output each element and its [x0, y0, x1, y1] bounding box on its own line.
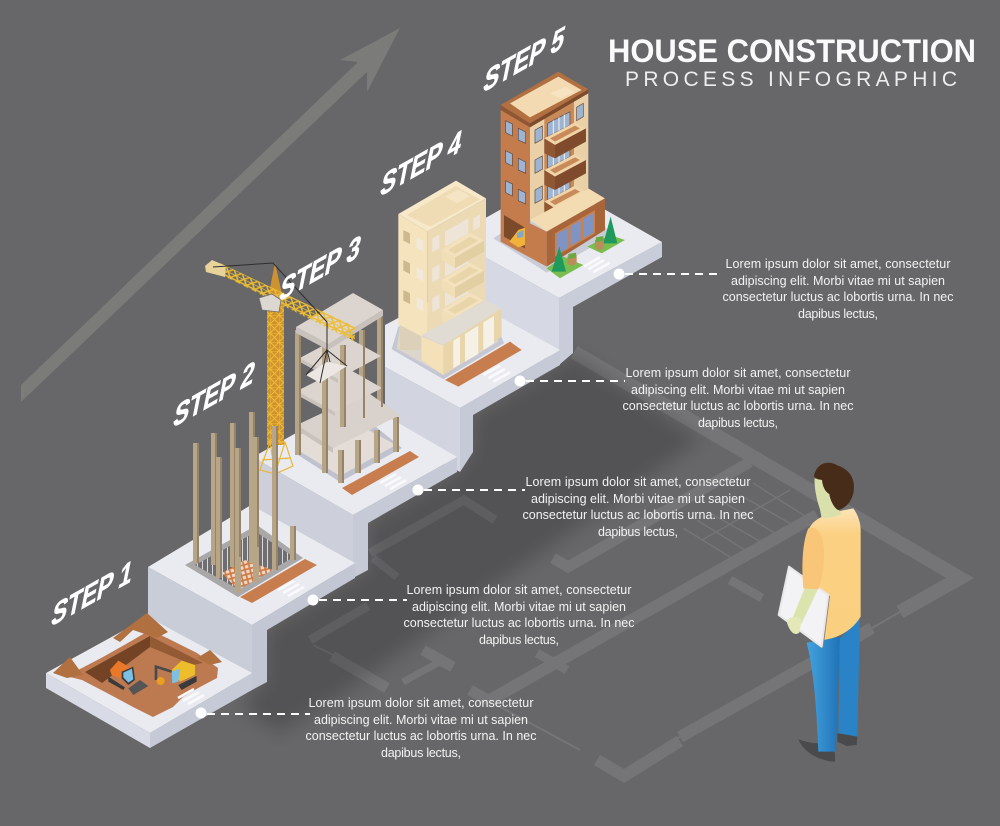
pit	[85, 636, 203, 695]
left wall	[501, 108, 547, 267]
sub heading: PROCESS INFOGRAPHIC	[625, 68, 957, 91]
crosswalk	[483, 366, 510, 382]
roof	[501, 72, 588, 127]
crosswalk	[584, 257, 610, 272]
description: Lorem ipsum dolor sit amet, consectetur	[526, 475, 750, 489]
tablet	[779, 567, 830, 648]
roof	[398, 181, 486, 232]
slabs	[297, 335, 400, 453]
excavator	[156, 661, 197, 690]
floor pad and road strip	[295, 418, 419, 495]
crosswalk	[278, 581, 304, 596]
left windows	[506, 121, 526, 204]
arm	[792, 587, 818, 623]
hand	[787, 617, 802, 634]
step 5 building	[493, 72, 625, 278]
description	[622, 366, 854, 430]
column shading	[299, 317, 399, 483]
description: Lorem ipsum dolor sit amet, consectetur	[308, 696, 534, 710]
platform: step 2	[148, 505, 355, 690]
trees and planters	[547, 217, 625, 278]
garage with car	[504, 215, 525, 248]
right wall	[427, 198, 486, 332]
connector	[514, 376, 625, 386]
cables and hanging slab	[213, 263, 347, 383]
cab	[259, 294, 281, 312]
callout step 1	[196, 696, 536, 760]
window mullions	[553, 115, 564, 197]
step labels	[48, 18, 568, 635]
step 2 foundation	[185, 412, 317, 603]
connector	[308, 594, 407, 606]
growth arrow	[21, 28, 400, 402]
man holding plans	[779, 463, 861, 762]
description: adipiscing elit. Morbi vitae mi ut sapien	[631, 383, 845, 397]
description: Lorem ipsum dolor sit amet, consectetur	[406, 583, 632, 597]
description: consectetur luctus ac lobortis urna. In nec	[622, 399, 854, 413]
foundation pad	[392, 300, 504, 379]
bulldozer	[108, 661, 148, 695]
right windows	[535, 103, 583, 203]
platform: step 5	[450, 180, 662, 365]
back columns	[355, 317, 399, 473]
columns	[193, 412, 296, 592]
step 4 label: STEP 4	[377, 122, 465, 205]
shoes	[798, 733, 857, 762]
crane jib	[216, 263, 355, 342]
soil mounds	[53, 613, 222, 678]
left windows	[403, 230, 410, 304]
right wall	[530, 93, 588, 220]
balconies	[544, 122, 586, 222]
step 1 excavation	[53, 613, 222, 717]
description	[306, 696, 536, 760]
description	[404, 583, 634, 647]
description: adipiscing elit. Morbi vitae mi ut sapien	[314, 713, 528, 727]
base pad	[493, 193, 610, 273]
description: dapibus lectus,	[598, 525, 678, 539]
description	[522, 475, 754, 539]
step 5 label: STEP 5	[480, 18, 568, 101]
description: dapibus lectus,	[798, 307, 878, 321]
counterweight	[205, 260, 226, 277]
callout step 2	[308, 583, 634, 647]
connector	[614, 268, 722, 280]
trousers	[807, 618, 860, 752]
description: consectetur luctus ac lobortis urna. In nec	[522, 508, 754, 522]
description: adipiscing elit. Morbi vitae mi ut sapien	[412, 600, 626, 614]
soil	[66, 630, 218, 717]
platform: step 3	[253, 399, 457, 578]
title	[608, 33, 976, 91]
step 2 label: STEP 2	[170, 354, 258, 436]
step 1 label: STEP 1	[48, 552, 136, 635]
face and neck	[815, 478, 842, 518]
staircase platforms	[46, 180, 662, 748]
description: adipiscing elit. Morbi vitae mi ut sapien	[531, 492, 745, 506]
floor plan on the ground	[310, 352, 960, 776]
shadow cast by staircase	[245, 353, 700, 732]
connector	[412, 484, 525, 496]
description: dapibus lectus,	[698, 416, 778, 430]
tower crane	[205, 260, 355, 474]
crosswalk	[178, 689, 204, 704]
sleeve	[802, 528, 824, 589]
step 3 building frame	[295, 293, 419, 495]
hair	[814, 463, 854, 510]
top slab	[296, 293, 383, 350]
callout step 3	[412, 475, 754, 539]
road strip	[240, 559, 317, 603]
recessed brown wall	[544, 100, 574, 210]
crane base	[260, 442, 293, 474]
rebar pit	[185, 525, 303, 597]
description: Lorem ipsum dolor sit amet, consectetur	[726, 257, 950, 271]
description: Lorem ipsum dolor sit amet, consectetur	[626, 366, 850, 380]
crosswalk	[380, 474, 406, 489]
description: adipiscing elit. Morbi vitae mi ut sapien	[731, 274, 945, 288]
podium	[530, 188, 605, 267]
description: dapibus lectus,	[479, 633, 559, 647]
callout step 4	[514, 366, 854, 430]
right wall windows	[432, 214, 480, 312]
podium	[422, 300, 502, 375]
crane mast	[267, 303, 284, 445]
description	[722, 257, 954, 321]
description: dapibus lectus,	[381, 746, 461, 760]
balconies	[442, 233, 484, 328]
callout step 5	[614, 257, 954, 321]
front columns	[295, 330, 346, 483]
connector	[196, 708, 310, 718]
road strip	[445, 342, 522, 387]
torso	[803, 508, 861, 640]
platform: step 4	[385, 290, 560, 472]
description: consectetur luctus ac lobortis urna. In nec	[722, 290, 954, 304]
crane peak	[267, 263, 284, 303]
platform: step 1	[46, 617, 252, 748]
step 3 label: STEP 3	[276, 228, 364, 310]
left wall	[398, 214, 427, 337]
description: consectetur luctus ac lobortis urna. In nec	[306, 729, 536, 743]
main heading: HOUSE CONSTRUCTION	[608, 33, 976, 69]
description: consectetur luctus ac lobortis urna. In nec	[404, 616, 634, 630]
step 4 building	[392, 181, 522, 387]
